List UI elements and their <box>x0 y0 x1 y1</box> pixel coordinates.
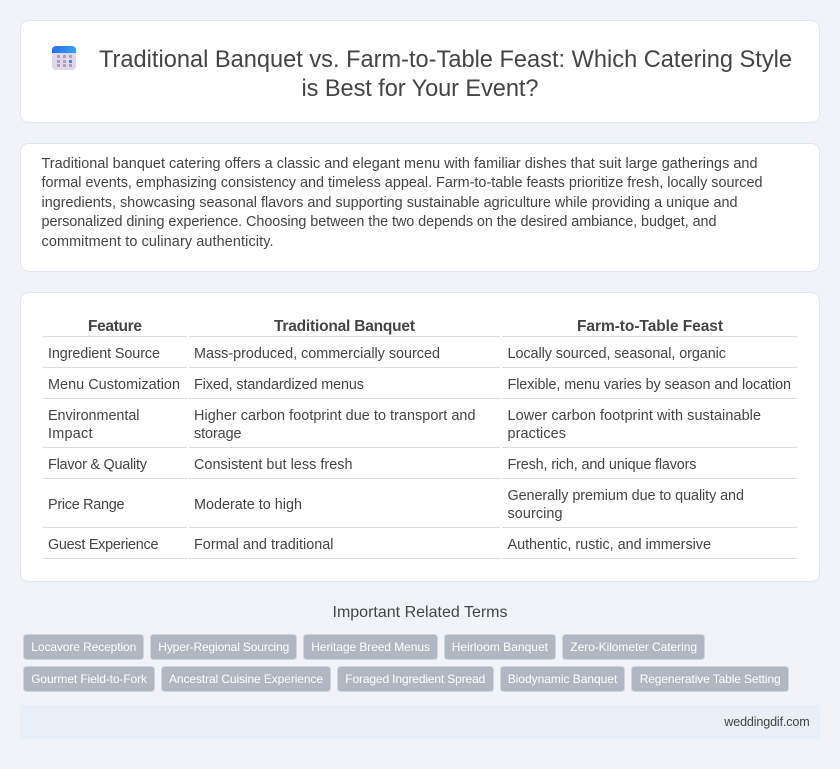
table header row: Feature <box>88 318 142 335</box>
table header row: Traditional Banquet <box>274 318 415 335</box>
tag: Foraged Ingredient Spread: Foraged Ingredient Spread <box>345 672 485 686</box>
tag: Ancestral Cuisine Experience: Ancestral Cuisine Experience <box>169 672 323 686</box>
tag list: related terms <box>24 634 788 692</box>
panel: title header <box>20 20 820 122</box>
table row: guest experience: Guest Experience <box>48 537 158 553</box>
table row: environmental impact: storage <box>194 426 242 442</box>
tag: Gourmet Field-to-Fork <box>24 666 154 692</box>
table row: ingredient source: Locally sourced, seasonal, organic <box>508 346 726 362</box>
tag: Regenerative Table Setting <box>632 666 788 692</box>
table header row <box>43 318 797 337</box>
tag: Zero-Kilometer Catering <box>562 634 704 660</box>
title: Traditional Banquet vs. Farm-to-Table Feast: Which Catering Style <box>99 47 792 73</box>
table row: guest experience: Authentic, rustic, and immersive <box>508 537 711 553</box>
table row: environmental impact: Lower carbon footprint with sustainable <box>508 408 761 424</box>
table row: menu customization: Flexible, menu varies by season and location <box>508 377 791 393</box>
table row: flavor and quality: Flavor & Quality <box>48 457 148 473</box>
tag: Regenerative Table Setting: Regenerative Table Setting <box>640 672 781 686</box>
text block: introduction paragraph: personalized dining experience. Choosing between the two depends on the desired ambiance, budget, and <box>42 214 716 230</box>
table row: menu customization: Fixed, standardized menus <box>194 377 364 393</box>
icon: calendar <box>52 46 76 70</box>
tag: Heritage Breed Menus: Heritage Breed Menus <box>311 640 430 654</box>
tag: Foraged Ingredient Spread <box>338 666 494 692</box>
tag: Hyper-Regional Sourcing <box>150 634 296 660</box>
tag: Locavore Reception <box>24 634 144 660</box>
tag: Heirloom Banquet: Heirloom Banquet <box>452 640 549 654</box>
footer <box>20 705 820 739</box>
heading: important related terms: Important Related Terms <box>332 604 508 621</box>
table row: environmental impact <box>43 408 797 448</box>
text block: introduction paragraph: Traditional banquet catering offers a classic and elegant menu with familiar dishes that suit large gatherings and <box>42 156 758 172</box>
tag: Heirloom Banquet <box>444 634 556 660</box>
table row: ingredient source <box>43 346 797 368</box>
table row: environmental impact: Environmental <box>48 408 140 424</box>
text block: introduction paragraph: formal events, emphasizing consistency and timeless appeal. Farm-to-table feasts prioritize fresh, locally sourced <box>42 175 762 191</box>
text block: introduction paragraph <box>42 156 762 250</box>
table row: flavor and quality <box>43 457 797 479</box>
table row: guest experience <box>43 537 797 559</box>
table row: environmental impact: Higher carbon footprint due to transport and <box>194 408 476 424</box>
table row: guest experience: Formal and traditional <box>194 537 334 553</box>
tag: Ancestral Cuisine Experience <box>162 666 330 692</box>
table row: menu customization <box>43 377 797 399</box>
tag: Zero-Kilometer Catering: Zero-Kilometer Catering <box>570 640 697 654</box>
table row: price range: Price Range <box>48 497 124 513</box>
tag: Locavore Reception: Locavore Reception <box>31 640 136 654</box>
table row: flavor and quality: Fresh, rich, and unique flavors <box>508 457 696 473</box>
table row: price range <box>43 488 797 528</box>
text block: introduction paragraph: ingredients, showcasing seasonal flavors and supporting sustainable agriculture while providing a unique and <box>42 195 738 211</box>
table row: price range: Moderate to high <box>194 497 302 513</box>
table row: menu customization: Menu Customization <box>48 377 180 393</box>
table header row: Farm-to-Table Feast <box>577 318 723 335</box>
table row: ingredient source: Ingredient Source <box>48 346 160 362</box>
title: is Best for Your Event? <box>302 76 538 102</box>
table row: environmental impact: practices <box>508 426 566 442</box>
table row: price range: Generally premium due to quality and <box>508 488 744 504</box>
footer: weddingdif.com <box>723 715 810 729</box>
tag: Hyper-Regional Sourcing: Hyper-Regional Sourcing <box>158 640 289 654</box>
panel: comparison table <box>20 292 820 582</box>
tag: Gourmet Field-to-Fork: Gourmet Field-to-Fork <box>31 672 148 686</box>
table row: environmental impact: Impact <box>48 426 92 442</box>
tag: Biodynamic Banquet <box>500 666 624 692</box>
tag: Biodynamic Banquet: Biodynamic Banquet <box>508 672 618 686</box>
text block: introduction paragraph: commitment to culinary authenticity. <box>42 234 274 250</box>
table row: ingredient source: Mass-produced, commercially sourced <box>194 346 440 362</box>
table row: flavor and quality: Consistent but less fresh <box>194 457 352 473</box>
table row: price range: sourcing <box>508 506 562 522</box>
tag: Heritage Breed Menus <box>304 634 438 660</box>
title <box>99 47 792 102</box>
panel: introduction <box>20 144 820 272</box>
